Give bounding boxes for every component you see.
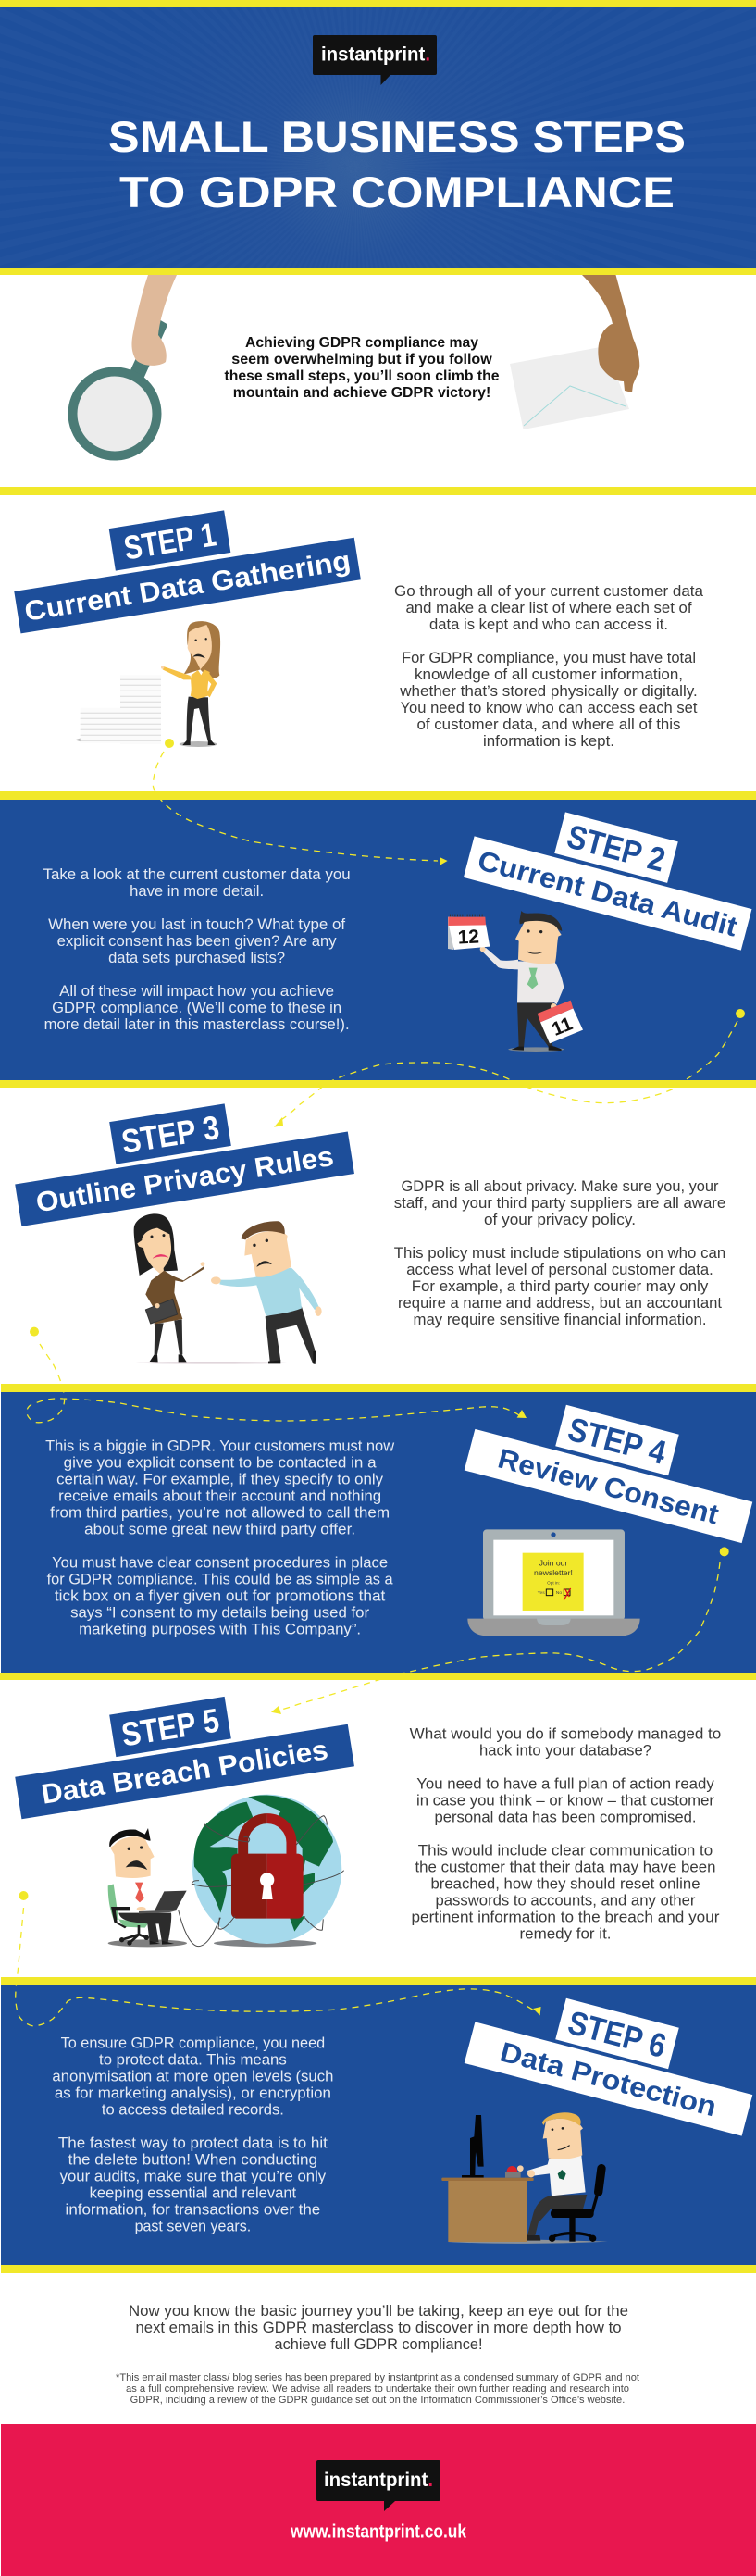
text: step 2: more detail later in this masterclass course!). (44, 1016, 350, 1033)
text: step 3: GDPR is all about privacy. Make sure you, your (402, 1178, 719, 1195)
text: step 6: keeping essential and relevant (90, 2184, 297, 2201)
text: disclaimer (116, 2372, 639, 2406)
heading: step 3: Outline Privacy Rules (34, 1141, 336, 1218)
heading: step 5: Data Breach Policies (40, 1735, 330, 1811)
text: step 3: of your privacy policy. (484, 1212, 636, 1228)
illustration: laptop with newsletter opt-in: Opt in: (547, 1581, 560, 1586)
text: step 4: receive emails about their account and nothing (58, 1488, 381, 1505)
icon: padlock (231, 1819, 304, 1919)
figure: woman with tablet (134, 1213, 204, 1362)
title (108, 113, 686, 218)
text: step 3: access what level of personal customer data. (406, 1262, 713, 1278)
heading: step 5 (15, 1697, 354, 1819)
icon: globe (192, 1795, 341, 1944)
illustration: laptop with newsletter opt-in: Yes (538, 1590, 545, 1596)
text: step 3: This policy must include stipulations on who can (394, 1245, 725, 1262)
panel: step 3 (0, 1088, 756, 1384)
icon: calendar 12: 12 (457, 926, 479, 949)
arrow: step 4 to step 5 (271, 1547, 729, 1714)
text: closing message: achieve full GDPR compliance! (274, 2336, 483, 2353)
icon: calendar 11: 11 (549, 1013, 576, 1040)
panel: step 1 (0, 495, 756, 791)
text: step 4: certain way. For example, if they specify to only (56, 1472, 384, 1488)
text: step 3: staff, and your third party suppliers are all aware (394, 1195, 725, 1212)
text: step 2: GDPR compliance. (We’ll come to these in (52, 1000, 341, 1016)
text: step 2: explicit consent has been given? Are any (57, 933, 337, 950)
text: website url: www.instantprint.co.uk (290, 2521, 467, 2542)
logo: instantprint footer (316, 2460, 440, 2511)
text: step 6: your audits, make sure that you’re only (60, 2168, 327, 2184)
figure: worried man at laptop (108, 1828, 187, 1946)
arrow: step 5 to step 6 (16, 1891, 541, 2026)
logo: instantprint footer: instantprint. (324, 2470, 433, 2491)
text: step 3: may require sensitive financial information. (413, 1312, 707, 1328)
text: intro: Achieving GDPR compliance may (245, 335, 478, 351)
arrow: step 3 to step 4 (27, 1327, 527, 1423)
text: step 1: Go through all of your current customer data (394, 583, 704, 600)
text: step 5: hack into your database? (479, 1742, 651, 1759)
text: closing message (129, 2303, 628, 2353)
text: step 4: This is a biggie in GDPR. Your customers must now (45, 1438, 394, 1455)
heading: step 4: Review Consent (495, 1443, 722, 1531)
icon: hand with magnifying glass (72, 275, 177, 455)
heading: step 3 (15, 1103, 354, 1226)
illustration: laptop with newsletter opt-in: newsletter! (534, 1568, 573, 1577)
text: step 1: You need to know who can access each set (400, 700, 698, 716)
text: step 6: To ensure GDPR compliance, you need (61, 2035, 325, 2051)
heading: step 6: STEP 6 (564, 2003, 670, 2065)
text: step 5: pertinent information to the breach and your (411, 1909, 720, 1925)
text: step 6: the delete button! When conducting (68, 2151, 317, 2168)
heading: step 2 (464, 812, 751, 951)
text: step 1: information is kept. (483, 733, 614, 750)
text: step 6: as for marketing analysis), or encryption (55, 2084, 331, 2101)
illustration: laptop with newsletter opt-in: Join our (539, 1559, 568, 1568)
illustration: man at desk with delete button (441, 2112, 608, 2244)
text: step 1: of customer data, and where all of this (416, 716, 681, 733)
text: intro: these small steps, you’ll soon climb the (224, 368, 500, 384)
text: step 6: information, for transactions over the (66, 2201, 320, 2218)
text: disclaimer: as a full comprehensive review. We advise all readers to undertake their own further reading and research into (126, 2383, 629, 2395)
text: step 2: All of these will impact how you achieve (59, 983, 334, 1000)
text: step 6: anonymisation at more open levels (such (52, 2068, 333, 2084)
text: step 5: passwords to accounts, and any other (435, 1892, 696, 1909)
text: step 2 (43, 866, 351, 1033)
panel: header background (0, 7, 756, 268)
figure: man gesturing (211, 1221, 322, 1364)
text: step 4: tick box on a flyer given out for promotions that (55, 1588, 386, 1605)
text: step 6: to access detailed records. (102, 2101, 284, 2118)
text: step 6: past seven years. (135, 2218, 251, 2234)
text: disclaimer: *This email master class/ blog series has been prepared by instantprint as a condensed summary of GDPR and not (116, 2372, 639, 2383)
text: intro (224, 335, 500, 401)
text: step 4: for GDPR compliance. This could be as simple as a (47, 1572, 393, 1588)
heading: step 4 (465, 1405, 752, 1543)
text: step 5: personal data has been compromised. (435, 1809, 696, 1825)
text: step 1: For GDPR compliance, you must have total (402, 650, 696, 666)
figure: man in chair (517, 2112, 601, 2242)
illustration: man at laptop and locked globe (108, 1795, 344, 1947)
heading: step 5: STEP 5 (119, 1700, 222, 1754)
panel: intro (0, 275, 756, 487)
text: step 4: You must have clear consent procedures in place (52, 1555, 388, 1572)
arrow: step 1 to step 2 (153, 739, 448, 865)
heading: step 2: STEP 2 (564, 817, 669, 879)
text: disclaimer: GDPR, including a review of the GDPR guidance set out on the Information Commissioner’s Office’s website. (130, 2395, 625, 2406)
heading: step 1: Current Data Gathering (22, 545, 353, 628)
arrow: step 2 to step 3 (274, 1009, 745, 1127)
text: step 5 (410, 1725, 721, 1942)
heading: step 6 (465, 1998, 752, 2136)
icon: calendar 11 (538, 1001, 583, 1043)
title: TO GDPR COMPLIANCE (119, 168, 675, 218)
logo: instantprint header: instantprint. (321, 44, 430, 65)
text: step 5: remedy for it. (520, 1925, 611, 1942)
text: closing message: Now you know the basic journey you’ll be taking, keep an eye out for the (129, 2303, 628, 2320)
text: step 6: to protect data. This means (99, 2051, 287, 2068)
text: step 4: about some great new third party offer. (84, 1522, 355, 1538)
text: step 2: Take a look at the current customer data you (43, 866, 351, 883)
panel: step 4 (1, 1392, 756, 1673)
text: step 2: data sets purchased lists? (108, 950, 285, 966)
text: step 6 (52, 2035, 333, 2234)
text: step 4 (45, 1438, 394, 1638)
title: SMALL BUSINESS STEPS (108, 113, 686, 162)
text: intro: mountain and achieve GDPR victory! (233, 385, 490, 401)
panel: closing text (116, 2303, 639, 2406)
illustration: laptop with newsletter opt-in: No (556, 1590, 562, 1596)
illustration: woman and man disagreeing (134, 1213, 322, 1364)
text: step 1: data is kept and who can access it. (429, 616, 668, 633)
icon: calendar 12 (448, 915, 490, 950)
illustration: woman with paper stacks (75, 621, 220, 747)
text: step 1: whether that’s stored physically or digitally. (399, 683, 698, 700)
text: step 4: from third parties, you’re not allowed to call them (50, 1505, 390, 1522)
text: step 2: When were you last in touch? What type of (48, 916, 346, 933)
illustration: man holding calendars (448, 911, 583, 1052)
text: step 5: What would you do if somebody managed to (410, 1725, 721, 1742)
text: step 4: give you explicit consent to be contacted in a (64, 1455, 377, 1472)
heading: step 6: Data Protection (497, 2037, 720, 2122)
logo: instantprint header (313, 35, 437, 85)
text: step 5: the customer that their data may have been (415, 1859, 716, 1875)
heading: step 1: STEP 1 (121, 515, 218, 567)
text: step 6: The fastest way to protect data is to hit (58, 2134, 328, 2151)
text: step 5: This would include clear communication to (418, 1842, 713, 1859)
text: step 5: breached, how they should reset online (431, 1875, 700, 1892)
text: step 1: and make a clear list of where each set of (405, 600, 692, 616)
panel: footer (1, 2424, 756, 2576)
panel: step 5 (0, 1680, 756, 1977)
text: step 4: marketing purposes with This Company”. (79, 1622, 361, 1638)
text: closing message: next emails in this GDPR masterclass to discover in more depth how to (135, 2320, 622, 2336)
text: step 3 (394, 1178, 725, 1328)
icon: hand with envelope (510, 275, 639, 429)
heading: step 3: STEP 3 (119, 1108, 222, 1161)
heading: step 4: STEP 4 (564, 1410, 670, 1472)
panel: step 2 (0, 800, 756, 1080)
text: step 5: You need to have a full plan of action ready (416, 1775, 714, 1792)
text: intro: seem overwhelming but if you follow (231, 352, 493, 367)
text: step 5: in case you think – or know – that customer (416, 1792, 715, 1809)
panel: step 6 (1, 1985, 756, 2265)
text: step 1 (394, 583, 704, 750)
text: step 2: have in more detail. (130, 883, 264, 900)
text: step 3: For example, a third party courier may only (412, 1278, 709, 1295)
text: step 3: require a name and address, but an accountant (398, 1295, 722, 1312)
text: step 4: says “I consent to my details being used for (70, 1605, 370, 1622)
heading: step 2: Current Data Audit (475, 845, 740, 943)
text: step 1: knowledge of all customer information, (415, 666, 683, 683)
heading: step 1 (14, 510, 361, 633)
illustration: laptop with newsletter opt-in (467, 1529, 640, 1636)
